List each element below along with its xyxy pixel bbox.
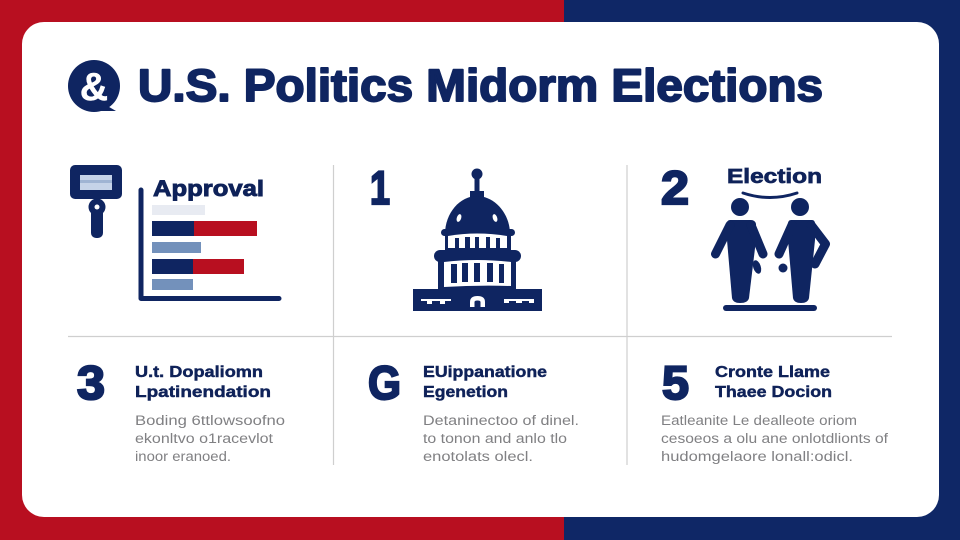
- heading 5: Cronte Llame: [715, 364, 830, 381]
- body 5: Eatleanite Le dealleote oriom: [661, 413, 857, 428]
- chart axes: [141, 190, 279, 298]
- icon: capitol building: [413, 168, 542, 311]
- text block G: Egenetion: [423, 384, 508, 401]
- body G: Detaninectoo of dinel.: [423, 413, 579, 428]
- letter G: G: [368, 356, 401, 409]
- dividers: [68, 165, 892, 465]
- heading G: EUippanatione: [423, 364, 547, 381]
- number 5: 5: [662, 356, 689, 409]
- text block 3: inoor eranoed.: [135, 449, 231, 464]
- election heading: Election: [727, 166, 822, 188]
- icon: ampersand logo: &: [80, 66, 108, 109]
- bars: [152, 205, 257, 290]
- text block 3: Lpatinendation: [135, 384, 271, 401]
- text block 5: hudomgelaore lonall:odicl.: [661, 449, 853, 464]
- text block 5: cesoeos a olu ane onlotdlionts of: [661, 431, 888, 446]
- heading 3: U.t. Dopaliomn: [135, 364, 263, 381]
- number 1: 1: [370, 161, 390, 214]
- text block 3: ekonltvo o1racevlot: [135, 431, 273, 446]
- text block G: enotolats olecl.: [423, 449, 533, 464]
- text block G: [368, 356, 579, 464]
- body 3: Boding 6ttlowsoofno: [135, 413, 285, 428]
- background: red side: [0, 0, 564, 540]
- number 3: 3: [77, 356, 105, 409]
- title: U.S. Politics Midorm Elections: [138, 60, 823, 111]
- text block 5: Thaee Docion: [715, 384, 832, 401]
- chart heading: Approval: [153, 176, 264, 201]
- background: navy side: [564, 0, 960, 540]
- text block 3: [77, 356, 285, 464]
- text block G: to tonon and anlo tlo: [423, 431, 567, 446]
- icon: ampersand logo: [68, 60, 120, 112]
- number 2: 2: [661, 161, 689, 214]
- icon: two figures: [716, 193, 826, 311]
- bar chart: approval: [141, 176, 279, 298]
- icon: approval paddle: [70, 165, 122, 238]
- text block 5: [661, 356, 888, 464]
